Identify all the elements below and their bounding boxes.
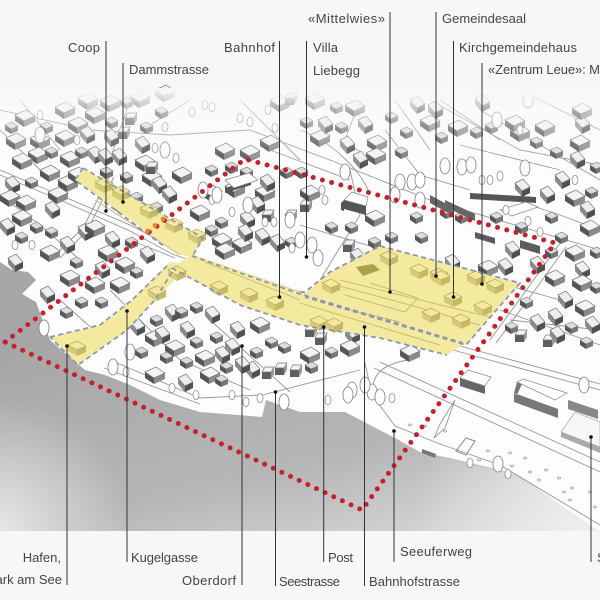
orange dots over zone (145, 217, 165, 233)
roads and rail lines (0, 95, 600, 525)
callout: Post: Post (328, 550, 353, 565)
zone: Dammstrasse (75, 168, 203, 257)
callout: Hafen, Park am See: Hafen, (23, 550, 61, 565)
callout: Villa Liebegg: Villa (313, 40, 339, 55)
panel: highlighted zones (50, 168, 520, 365)
callout: Post (322, 325, 353, 565)
callout: Kugelgasse: Kugelgasse (131, 550, 198, 565)
buildings (0, 85, 600, 458)
callout: Bahnhofstrasse (363, 325, 460, 589)
base map land (0, 88, 600, 531)
callout: Oberdorf: Oberdorf (182, 573, 236, 588)
callout: Zentrum Leue: «Zentrum Leue»: M (488, 62, 600, 77)
olive buildings and paths (68, 178, 504, 356)
callout: Bahnhof (224, 40, 281, 299)
zone: Kugelgasse (50, 262, 190, 365)
callout: Mittelwies (308, 11, 392, 294)
callout: Bahnhof: Bahnhof (224, 40, 275, 55)
callout: Bahnhofstrasse: Bahnhofstrasse (369, 574, 460, 589)
top fade of map (0, 88, 600, 168)
callout: Oberdorf (182, 344, 244, 588)
small park dots (408, 424, 597, 508)
callout: Seeuferweg: Seeuferweg (400, 544, 472, 559)
red dotted perimeter (5, 159, 555, 510)
callout: Dammstrasse (121, 62, 209, 204)
large building: church (341, 200, 366, 215)
callout: Dammstrasse: Dammstrasse (129, 62, 209, 77)
callout: Kirchgemeindehaus: Kirchgemeindehaus (459, 40, 578, 55)
callout: Kirchgemeindehaus (452, 40, 578, 299)
callout: Seeuferweg (392, 429, 472, 562)
callout: Coop: Coop (68, 40, 100, 55)
trees (12, 92, 589, 479)
callout: Zentrum Leue (480, 62, 600, 286)
callout: Seestrasse: Seestrasse (279, 574, 340, 589)
callout: Mittelwies: «Mittelwies» (308, 11, 385, 26)
callout: Villa Liebegg (305, 40, 360, 259)
callout: Seestrasse (274, 390, 340, 589)
callout: Kugelgasse (125, 309, 198, 565)
callout: right edge label (589, 435, 600, 565)
lake (0, 262, 600, 532)
zone: Bahnhofstrasse (172, 254, 466, 355)
zone: Mittelwies (305, 246, 520, 345)
callout: Hafen, Park am See (0, 344, 69, 587)
callout: Villa Liebegg: Liebegg (313, 63, 360, 78)
callout: Gemeindesaal: Gemeindesaal (442, 11, 526, 26)
callout: Coop (68, 40, 108, 213)
callout: Gemeindesaal (434, 11, 526, 278)
dashed zone outlines (50, 168, 520, 365)
